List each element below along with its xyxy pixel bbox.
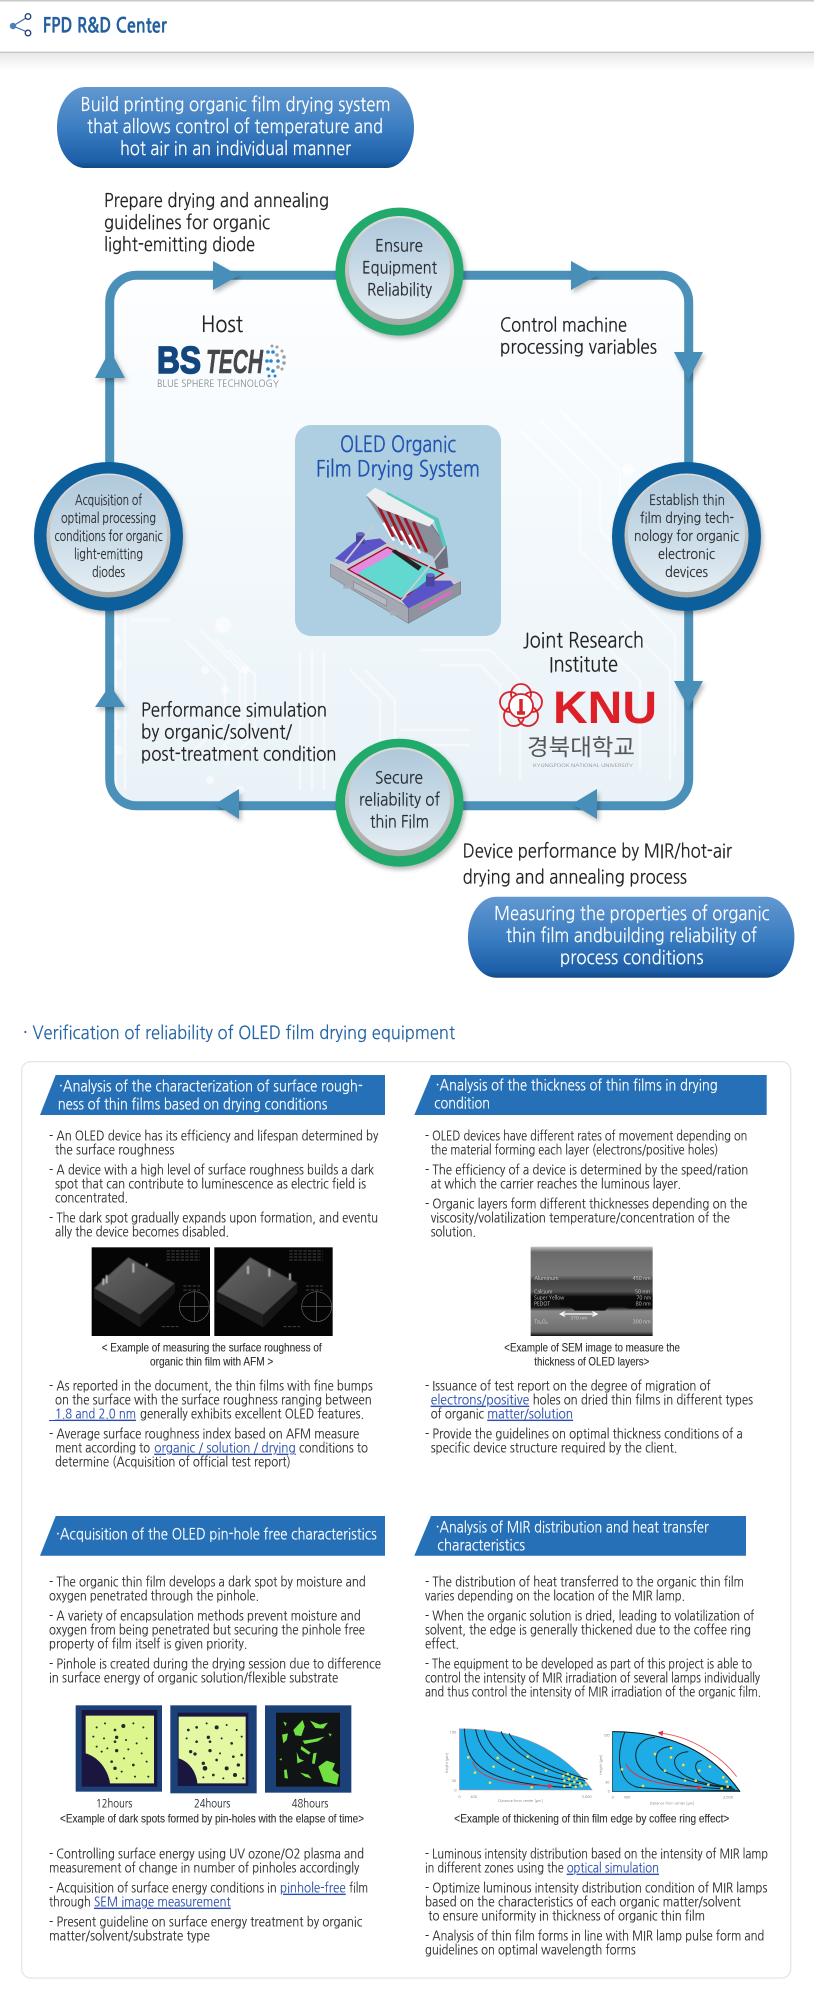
icon: drying machine illustration — [331, 488, 461, 623]
text block: roughness results: generally exhibits excellent OLED features. — [140, 1408, 364, 1421]
text block: roughness results: - Average surface roughness index based on AFM measure — [49, 1428, 359, 1441]
text block: MIR intro — [425, 1576, 761, 1699]
text block: roughness intro: - The dark spot gradually expands upon formation, and eventu — [49, 1212, 378, 1225]
callout: build printing system: Build printing organic film drying system — [80, 95, 390, 114]
node: secure reliability of thin film — [336, 739, 464, 867]
image: 24 hours — [170, 1705, 257, 1793]
heading: surface roughness: ·Analysis of the characterization of surface rough- — [59, 1080, 363, 1095]
text block: roughness intro: concentrated. — [55, 1192, 128, 1205]
image: SEM cross-section: PEDOT — [534, 1301, 550, 1306]
text block: pinhole results: - Acquisition of surface energy conditions in — [49, 1882, 277, 1895]
callout: build printing system: hot air in an individual manner — [120, 139, 351, 158]
node: acquisition of optimal conditions: Acquisition of — [75, 493, 143, 508]
text block: thickness results: electrons/positive — [431, 1394, 529, 1407]
text block: MIR results: optical simulation — [567, 1862, 659, 1875]
node: acquisition of optimal conditions — [34, 462, 183, 611]
text block: thickness results: specific device structure required by the client. — [431, 1442, 677, 1455]
arrow: top right — [571, 261, 597, 290]
image: SEM cross-section: 70 nm — [636, 1296, 652, 1301]
text block: roughness results: on the surface with the surface roughness ranging between — [55, 1394, 372, 1407]
text block: roughness intro: spot that can contribute to luminescence as electric field is — [55, 1178, 366, 1191]
text block: roughness intro: - A device with a high level of surface roughness builds a dark — [49, 1164, 374, 1177]
image: dark spots over time — [76, 1705, 351, 1793]
chart: recirculating flow: 0 — [608, 1790, 611, 1794]
node: secure reliability of thin film: thin Film — [370, 813, 429, 830]
callout: build printing system — [57, 87, 414, 168]
label: joint research institute: Institute — [549, 655, 618, 676]
panel: MIR distribution — [414, 1516, 768, 1957]
text block: MIR intro: control the intensity of MIR irradiation of several lamps individually — [425, 1672, 760, 1685]
chart: recirculating flow: Height [μm] — [599, 1755, 603, 1775]
callout: measuring the properties: thin film andbuilding reliability of — [506, 926, 757, 945]
callout: measuring the properties — [468, 897, 794, 978]
chart: outward flow: 0 — [458, 1795, 461, 1799]
text block: MIR intro: - The equipment to be developed as part of this project is able to — [425, 1658, 752, 1672]
text block: thickness intro: the material forming each layer (electrons/positive holes) — [431, 1144, 718, 1157]
text block: MIR intro: solvent, the edge is generally thickened due to the coffee ring — [425, 1624, 751, 1637]
labels: elapsed hours: 24hours — [194, 1797, 230, 1809]
text block: MIR intro: effect. — [425, 1638, 459, 1651]
heading: MIR distribution — [414, 1516, 746, 1556]
caption: AFM: organic thin film with AFM > — [150, 1355, 273, 1369]
node: establish thin film drying technology: devices — [665, 565, 708, 580]
chart: coffee ring flow — [445, 1729, 740, 1806]
label: performance simulation: Performance simulation — [141, 701, 327, 720]
heading: surface roughness — [40, 1075, 385, 1115]
callout: measuring the properties: Measuring the properties of organic — [494, 904, 770, 923]
label: device performance: drying and annealing process — [463, 868, 687, 887]
logo: Kyungpook National University — [500, 682, 657, 768]
label: device performance — [463, 842, 732, 887]
image: SEM cross-section: Calcium — [534, 1289, 553, 1294]
panel: surface roughness — [40, 1075, 385, 1469]
chart: outward flow: Height [μm] — [445, 1753, 449, 1773]
image: SEM cross-section: Aluminum — [534, 1276, 559, 1281]
text block: pinhole intro: in surface energy of organic solution/flexible substrate — [49, 1672, 338, 1685]
image: SEM cross-section — [531, 1247, 653, 1336]
chart: outward flow: 180 — [450, 1730, 457, 1734]
diagram background with circuit pattern — [110, 275, 689, 806]
text block: roughness results: determine (Acquisition of official test report) — [55, 1456, 291, 1469]
chart: recirculating flow: 0 — [612, 1796, 615, 1800]
text block: pinhole intro — [49, 1576, 381, 1685]
arrow: top left — [213, 261, 239, 290]
text block: roughness intro — [49, 1130, 378, 1239]
caption: AFM — [102, 1341, 322, 1369]
label: device performance: Device performance by MIR/hot-air — [463, 842, 732, 861]
text block: thickness results: - Provide the guidelines on optimal thickness conditions of a — [425, 1428, 743, 1441]
panel: pin-hole free — [40, 1516, 385, 1943]
text block: pinhole results: pinhole-free — [280, 1882, 346, 1895]
chart: recirculating flow: 400 — [624, 1796, 631, 1800]
heading: film thickness: condition — [434, 1097, 490, 1112]
text block: pinhole intro: - A variety of encapsulation methods prevent moisture and — [49, 1610, 361, 1623]
label: prepare guidelines: Prepare drying and annealing — [104, 191, 329, 210]
arrow: bottom right — [572, 789, 597, 819]
chart: recirculating flow: 30 — [605, 1780, 610, 1784]
text block: pinhole intro: oxygen from being penetrated but securing the pinhole free — [49, 1624, 365, 1637]
text block: pinhole results: measurement of change in number of pinholes accordingly — [49, 1862, 359, 1875]
node: establish thin film drying technology: film drying tech- — [640, 511, 734, 526]
panel: film thickness — [414, 1075, 767, 1455]
logo: Kyungpook National University: KNU — [553, 682, 657, 733]
label: joint research institute: Joint Research — [523, 631, 644, 652]
logo: BS Tech — [157, 340, 286, 389]
node: establish thin film drying technology: electronic — [658, 547, 715, 562]
arrow: left lower — [95, 685, 125, 707]
text block: thickness results: - Issuance of test report on the degree of migration of — [425, 1380, 711, 1393]
icon: KNU emblem — [500, 684, 542, 726]
chart: outward flow: 30 — [452, 1779, 457, 1783]
node: acquisition of optimal conditions: optimal processing — [61, 511, 156, 526]
labels: elapsed hours: 48hours — [292, 1797, 328, 1809]
chart: outward flow: 400 — [470, 1795, 478, 1799]
labels: elapsed hours — [96, 1797, 328, 1809]
text block: MIR intro: - When the organic solution is dried, leading to volatilization of — [425, 1610, 755, 1623]
text block: thickness intro: solution. — [431, 1226, 476, 1239]
text block: roughness intro: the surface roughness — [55, 1144, 175, 1157]
caption: SEM: thickness of OLED layers> — [534, 1355, 649, 1369]
chart: recirculating flow: 3,600 — [723, 1796, 734, 1800]
label: control machine variables — [500, 316, 657, 357]
caption: SEM — [504, 1341, 680, 1369]
heading: surface roughness: ness of thin films based on drying conditions — [58, 1098, 327, 1113]
heading: system name: OLED Organic — [340, 434, 456, 456]
text block: pinhole results: - Present guideline on surface energy treatment by organic — [49, 1916, 362, 1929]
image: SEM cross-section: Super Yellow — [534, 1296, 565, 1301]
heading: film thickness: ·Analysis of the thickness of thin films in drying — [436, 1079, 718, 1094]
logo: Kyungpook National University: 경북대학교 — [527, 728, 635, 762]
label: performance simulation — [141, 701, 336, 764]
text block: roughness intro: - An OLED device has its efficiency and lifespan determined by — [49, 1130, 378, 1143]
image: SEM cross-section: 450 nm — [633, 1276, 651, 1281]
node: ensure equipment reliability — [336, 208, 464, 336]
text block: MIR results: based on the characteristics of each organic matter/solvent — [425, 1896, 741, 1909]
label: performance simulation: by organic/solvent/ — [141, 723, 293, 742]
node: secure reliability of thin film: reliability of — [359, 791, 440, 808]
text block: pinhole intro: oxygen penetrated through the pinhole. — [49, 1590, 259, 1603]
header bar — [0, 0, 814, 70]
text block: thickness intro: at which the carrier reaches the luminous layer. — [431, 1178, 681, 1191]
header title: FPD R&D Center — [43, 16, 167, 36]
caption: SEM: <Example of SEM image to measure the — [504, 1341, 680, 1355]
arrows on the loop — [95, 261, 703, 819]
heading: system name — [316, 434, 480, 481]
heading: pin-hole free: ·Acquisition of the OLED pin-hole free characteristics — [56, 1528, 377, 1543]
text block: thickness results: matter/solution — [487, 1408, 573, 1421]
text block: MIR results: - Optimize luminous intensity distribution condition of MIR lamps — [425, 1882, 768, 1895]
text block: roughness results: 1.8 and 2.0 nm — [55, 1408, 136, 1421]
logo: BS Tech: BLUE SPHERE TECHNOLOGY — [157, 380, 280, 389]
process loop frame — [110, 275, 689, 806]
arrow: bottom left — [215, 789, 239, 819]
chart: outward flow: Distance from center [μm] — [498, 1799, 543, 1803]
chart: recirculating flow — [599, 1731, 740, 1806]
callout: build printing system: that allows control of temperature and — [87, 117, 383, 136]
label: performance simulation: post-treatment condition — [141, 745, 336, 764]
image: AFM measurements — [92, 1247, 333, 1336]
text block: roughness results: organic / solution / drying — [154, 1442, 296, 1455]
logo: Kyungpook National University: KYUNGPOOK NATIONAL UNIVERSITY — [533, 763, 633, 768]
caption: coffee ring: <Example of thickening of thin film edge by coffee ring effect> — [454, 1811, 729, 1825]
caption: AFM: < Example of measuring the surface roughness of — [102, 1341, 322, 1355]
text block: pinhole intro: property of film itself is given priority. — [49, 1638, 247, 1651]
text block: MIR intro: varies depending on the location of the MIR lamp. — [425, 1590, 685, 1603]
node: ensure equipment reliability: Ensure — [375, 238, 423, 255]
label: joint research institute — [523, 631, 644, 676]
node: ensure equipment reliability: Equipment — [362, 260, 438, 277]
text block: thickness results: holes on dried thin films in different types — [533, 1394, 753, 1407]
text block: thickness intro: - The efficiency of a device is determined by the speed/ration — [425, 1164, 748, 1177]
panel: verification card — [22, 1062, 791, 1978]
node: acquisition of optimal conditions: conditions for organic — [54, 529, 162, 544]
text block: MIR results: to ensure uniformity in thickness of organic thin film — [428, 1910, 705, 1923]
image: 12 hours — [76, 1705, 162, 1792]
heading: MIR distribution: characteristics — [437, 1539, 525, 1554]
image: SEM cross-section: Ta₂O₅ — [534, 1319, 548, 1324]
text block: pinhole intro: - The organic thin film develops a dark spot by moisture and — [49, 1576, 366, 1589]
label: prepare guidelines: guidelines for organic — [104, 213, 270, 232]
node: acquisition of optimal conditions: diodes — [92, 565, 125, 580]
heading: film thickness — [414, 1075, 767, 1115]
node: establish thin film drying technology: Establish thin — [649, 493, 725, 508]
text block: thickness intro: viscosity/volatilization temperature/concentration of the — [431, 1212, 730, 1225]
image: SEM cross-section: 50 nm — [635, 1289, 650, 1294]
text block: pinhole results: - Controlling surface energy using UV ozone/O2 plasma and — [49, 1848, 364, 1861]
node: establish thin film drying technology: nology for organic — [634, 529, 739, 544]
caption: dark spots: <Example of dark spots formed by pin-holes with the elapse of time> — [60, 1811, 364, 1825]
chart: recirculating flow: 180 — [603, 1734, 610, 1738]
text block: pinhole results: through — [49, 1896, 91, 1909]
label: prepare guidelines — [104, 191, 329, 254]
text block: roughness results: conditions to — [299, 1442, 368, 1455]
text block: thickness intro: - Organic layers form different thicknesses depending on the — [425, 1198, 747, 1211]
arrow: right upper — [674, 352, 703, 380]
chart: outward flow: 0 — [454, 1788, 457, 1792]
text block: roughness results: - As reported in the document, the thin films with fine bumps — [49, 1380, 373, 1393]
image: SEM cross-section: 370 nm — [570, 1316, 587, 1321]
arrow: right lower — [674, 681, 703, 708]
text block: thickness intro: - OLED devices have different rates of movement depending on — [425, 1130, 747, 1143]
text block: roughness results — [49, 1380, 373, 1469]
image: SEM cross-section: 80 nm — [636, 1301, 651, 1306]
text block: thickness intro — [425, 1130, 748, 1239]
label: prepare guidelines: light-emitting diode — [104, 235, 255, 254]
text block: MIR results: guidelines on optimal wavelength forms — [425, 1944, 636, 1957]
label: host: Host — [201, 314, 243, 336]
node: ensure equipment reliability: Reliability — [367, 282, 432, 299]
text block: pinhole results: film — [349, 1882, 368, 1895]
logo: BS Tech: TECH — [206, 343, 264, 380]
callout: measuring the properties: process conditions — [560, 948, 704, 967]
heading: system name: Film Drying System — [316, 459, 480, 481]
logo: BS Tech: BS — [157, 340, 201, 382]
node: acquisition of optimal conditions: light-emitting — [74, 547, 143, 562]
heading: MIR distribution: ·Analysis of MIR distribution and heat transfer — [436, 1521, 709, 1536]
node: secure reliability of thin film: Secure — [375, 769, 423, 786]
text block: roughness intro: ally the device becomes disabled. — [55, 1226, 229, 1239]
text block: MIR results: in different zones using the — [425, 1862, 564, 1875]
section heading: · Verification of reliability of OLED film drying equipment — [23, 1024, 455, 1042]
text block: thickness results: of organic — [431, 1408, 484, 1421]
text block: pinhole results: matter/solvent/substrate type — [49, 1930, 210, 1943]
labels: elapsed hours: 12hours — [96, 1797, 132, 1809]
text block: MIR results — [425, 1848, 768, 1957]
text block: MIR results: - Analysis of thin film forms in line with MIR lamp pulse form and — [425, 1930, 764, 1943]
text block: thickness results — [425, 1380, 753, 1455]
image: SEM cross-section: 300 nm — [633, 1319, 651, 1324]
text block: pinhole results: SEM image measurement — [94, 1896, 231, 1909]
image: 48 hours — [265, 1705, 351, 1793]
chart: recirculating flow: Distance from center [μm] — [650, 1802, 694, 1806]
arrow: left upper — [95, 350, 125, 378]
icon: share nodes — [10, 14, 31, 36]
chart: outward flow: 3,600 — [582, 1795, 592, 1799]
text block: MIR intro: - The distribution of heat transferred to the organic thin film — [425, 1576, 744, 1589]
node: establish thin film drying technology — [612, 462, 761, 611]
heading: pin-hole free — [40, 1516, 385, 1556]
chart: outward flow — [445, 1729, 592, 1803]
text block: pinhole intro: - Pinhole is created during the drying session due to difference — [49, 1658, 381, 1671]
label: control machine variables: Control machine — [500, 316, 627, 335]
panel: OLED organic film drying system — [295, 425, 501, 636]
label: control machine variables: processing variables — [500, 338, 657, 357]
text block: roughness results: ment according to — [55, 1442, 150, 1455]
text block: pinhole results — [49, 1848, 368, 1943]
